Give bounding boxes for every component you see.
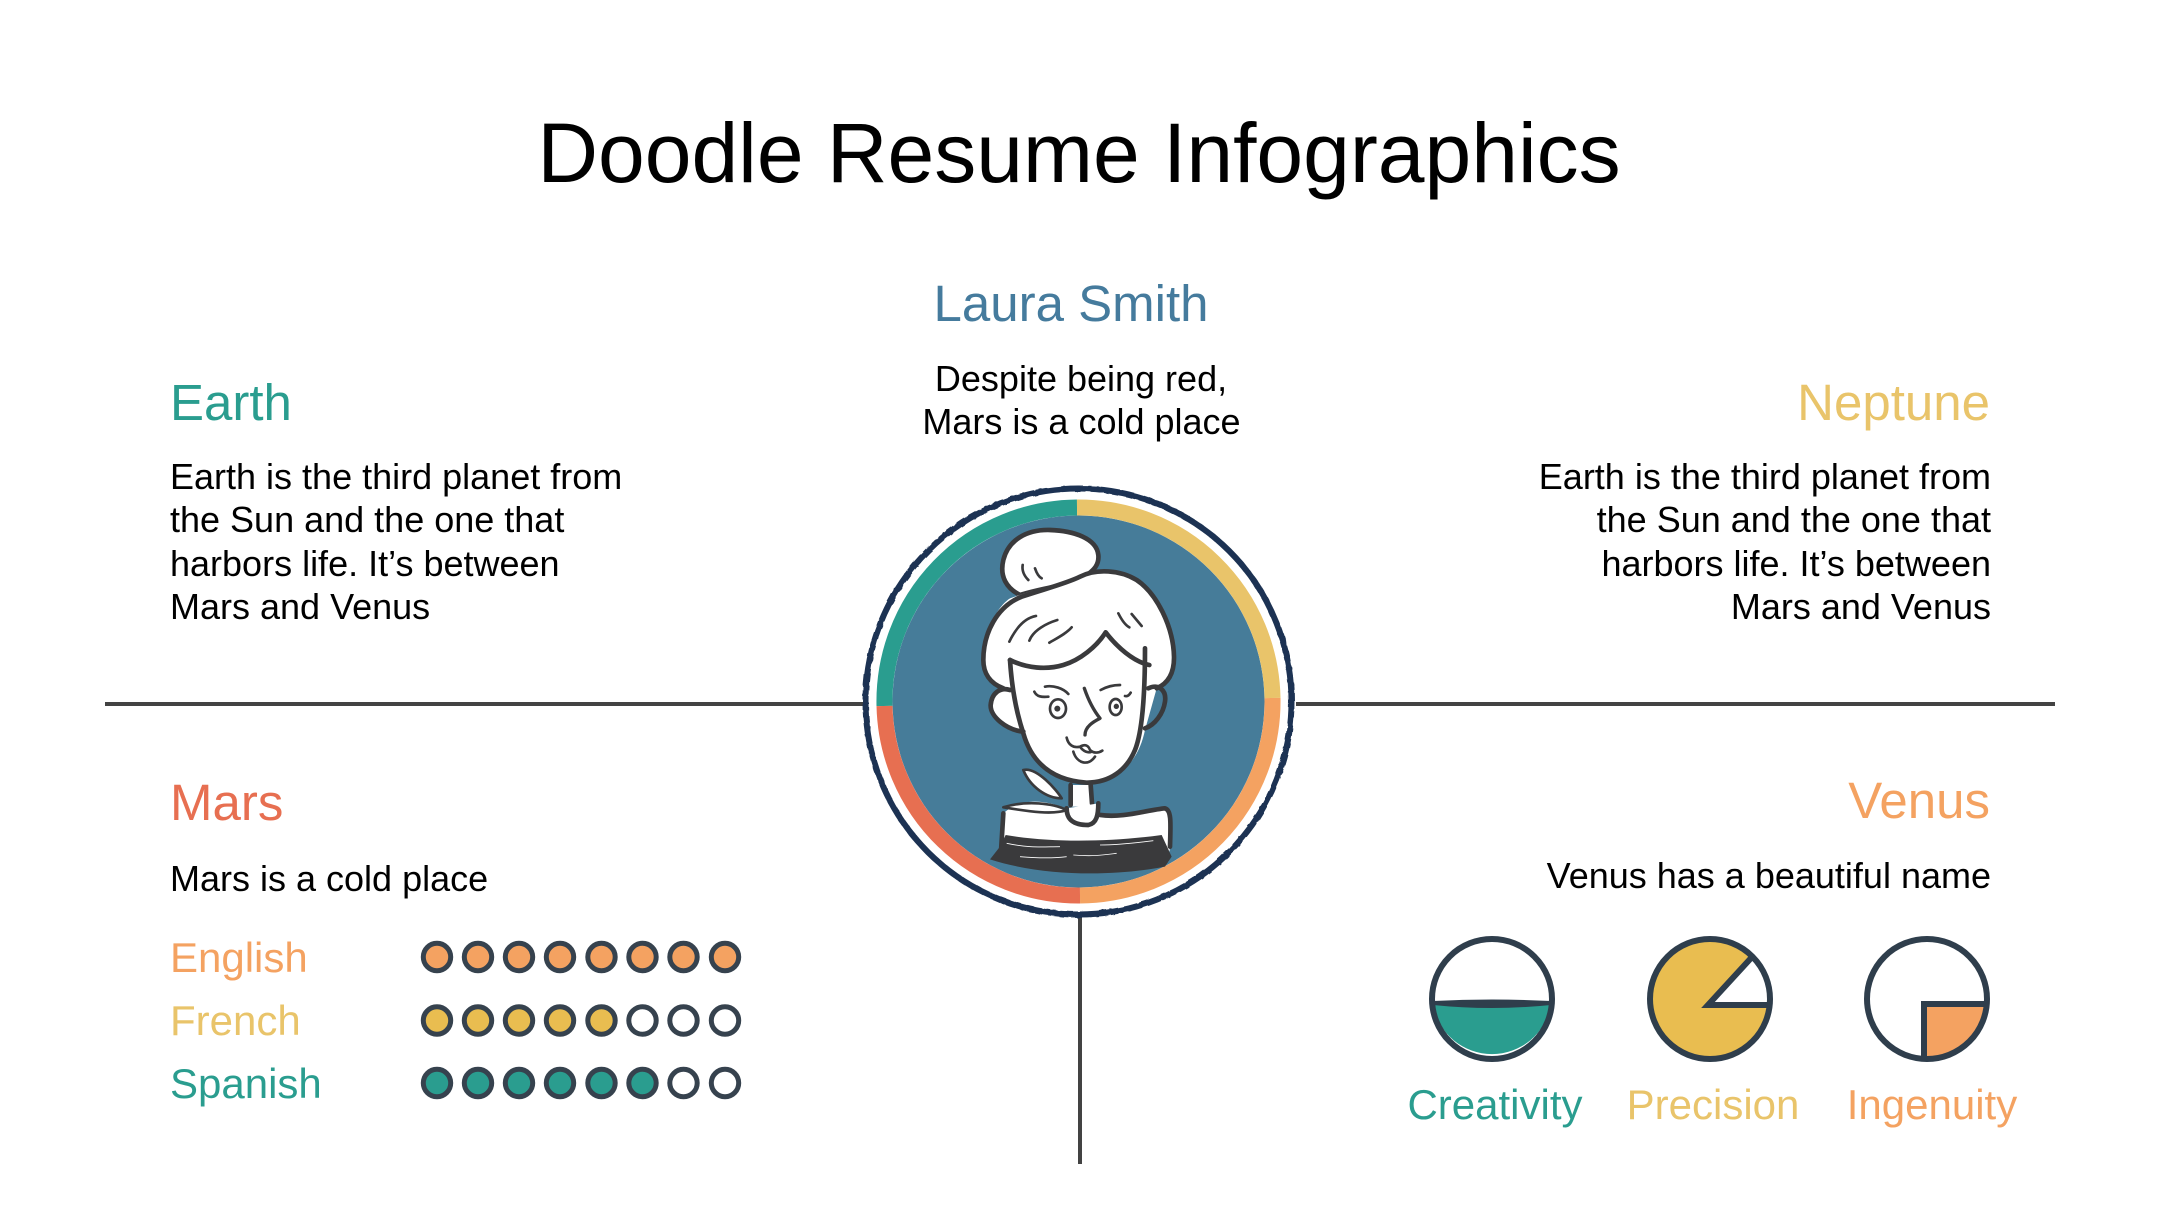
pie chart: Ingenuity: Ingenuity xyxy=(1847,1081,2017,1128)
pie chart: Creativity xyxy=(1407,939,1583,1128)
pie chart: Precision: Precision xyxy=(1627,1081,1799,1128)
language row: English xyxy=(170,934,739,981)
panel: Venus skills xyxy=(1407,772,2017,1128)
title: Doodle Resume Infographics xyxy=(537,106,1621,200)
pie chart: Ingenuity xyxy=(1847,939,2017,1128)
language row: French: French xyxy=(170,997,301,1044)
name heading: Laura Smith xyxy=(934,275,1208,332)
language row: Spanish: Spanish xyxy=(170,1060,322,1107)
doodle portrait of Laura xyxy=(983,530,1174,873)
Neptune text: the Sun and the one that xyxy=(1597,499,1991,540)
Neptune heading: Neptune xyxy=(1797,374,1990,431)
Neptune text: Earth is the third planet from xyxy=(1539,456,1991,497)
language row: English: English xyxy=(170,934,308,981)
Mars text: Mars is a cold place xyxy=(170,858,488,899)
Mars heading: Mars xyxy=(170,774,283,831)
four-colour ring xyxy=(884,507,1273,896)
pie chart: Creativity: Creativity xyxy=(1407,1081,1583,1128)
profile description: Despite being red, xyxy=(935,358,1227,399)
central portrait badge xyxy=(866,488,1292,914)
language row: French xyxy=(170,997,739,1044)
horizontal and vertical connector lines xyxy=(105,704,2055,1164)
Earth text: the Sun and the one that xyxy=(170,499,564,540)
Earth text: Earth is the third planet from xyxy=(170,456,622,497)
Earth text: harbors life. It’s between xyxy=(170,543,560,584)
Earth text: Mars and Venus xyxy=(170,586,430,627)
Neptune text: Mars and Venus xyxy=(1731,586,1991,627)
pie chart: Precision xyxy=(1627,939,1799,1128)
Venus text: Venus has a beautiful name xyxy=(1547,855,1991,896)
face details xyxy=(1034,685,1131,763)
sketchy outer ring xyxy=(866,488,1292,914)
profile description: Mars is a cold place xyxy=(922,401,1241,442)
blue portrait disc xyxy=(892,516,1264,888)
panel: Neptune xyxy=(1539,374,1991,627)
panel: Mars languages xyxy=(170,774,739,1107)
Neptune text: harbors life. It’s between xyxy=(1601,543,1991,584)
Earth heading: Earth xyxy=(170,374,292,431)
panel: Earth xyxy=(170,374,622,627)
Venus heading: Venus xyxy=(1848,772,1990,829)
panel: profile xyxy=(922,275,1241,442)
language row: Spanish xyxy=(170,1060,739,1107)
